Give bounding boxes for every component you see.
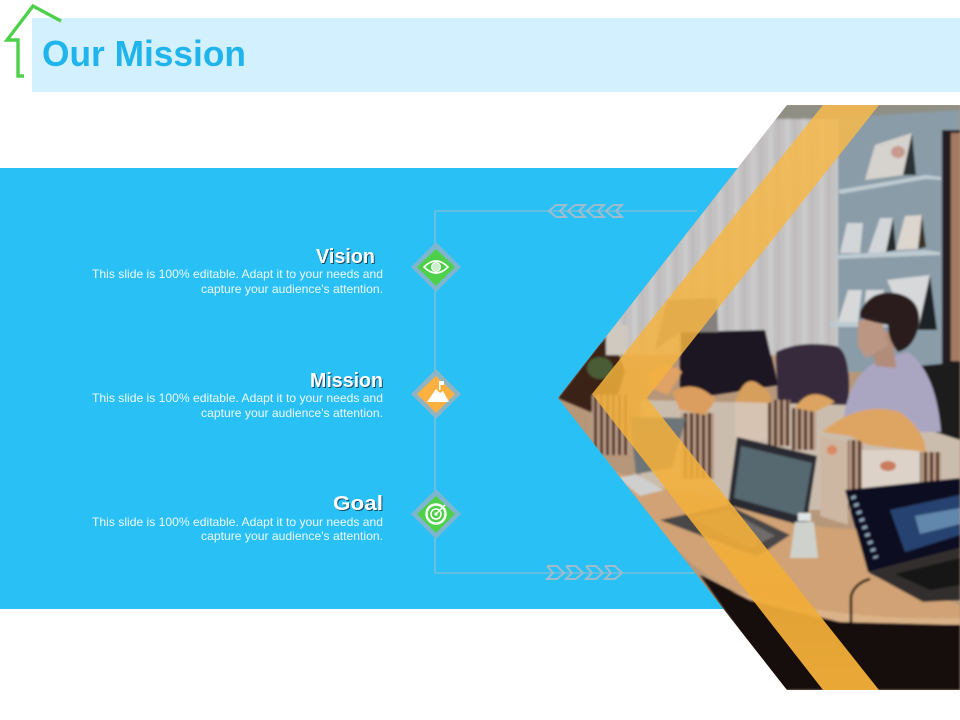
vision text block <box>92 246 383 296</box>
floor shadow <box>700 575 960 690</box>
gift bags <box>592 366 941 525</box>
vision text block: Vision <box>317 247 376 269</box>
mission text block: Mission <box>311 371 384 393</box>
mission text block <box>92 370 384 420</box>
icon: green house outline <box>7 6 61 76</box>
vision text block: Vision <box>316 246 375 268</box>
man <box>842 293 941 432</box>
plant and left edge <box>558 325 628 420</box>
mission text block: This slide is 100% editable. Adapt it to your needs and <box>92 391 383 405</box>
dark monitor and bench <box>655 298 778 400</box>
table background and papers <box>640 400 960 510</box>
arrow: right-pointing chevrons <box>547 566 622 579</box>
goal text block: This slide is 100% editable. Adapt it to your needs and <box>92 515 383 529</box>
goal text block: Goal <box>333 493 383 515</box>
shelves and frames <box>830 133 941 330</box>
icon: mission mountain diamond <box>411 369 461 419</box>
goal text block <box>92 493 384 543</box>
title: Our Mission <box>42 33 246 74</box>
water bottle <box>790 513 818 558</box>
photo: meeting room in hexagon <box>558 105 960 690</box>
ceiling band <box>760 105 960 119</box>
mission text block: capture your audience's attention. <box>201 406 383 420</box>
right laptop <box>845 478 960 602</box>
panel: blue band <box>0 168 745 609</box>
door <box>942 130 960 365</box>
centre laptop <box>660 437 817 557</box>
goal text block: capture your audience's attention. <box>201 529 383 543</box>
icon: goal target diamond <box>411 489 461 539</box>
goal text block: Goal <box>334 494 384 516</box>
title banner <box>32 18 960 92</box>
round table <box>610 470 960 625</box>
vision text block: capture your audience's attention. <box>201 282 383 296</box>
mission text block: Mission <box>310 370 383 392</box>
vision text block: This slide is 100% editable. Adapt it to your needs and <box>92 267 383 281</box>
connector frame lines <box>435 211 697 573</box>
arrow: left-pointing chevrons <box>549 205 622 217</box>
icon: vision eye diamond <box>411 242 461 292</box>
left laptop <box>618 417 686 496</box>
chairs <box>776 344 960 440</box>
curtain wall <box>600 105 840 355</box>
yellow translucent chevron <box>592 105 879 690</box>
shelving wall <box>838 110 960 372</box>
